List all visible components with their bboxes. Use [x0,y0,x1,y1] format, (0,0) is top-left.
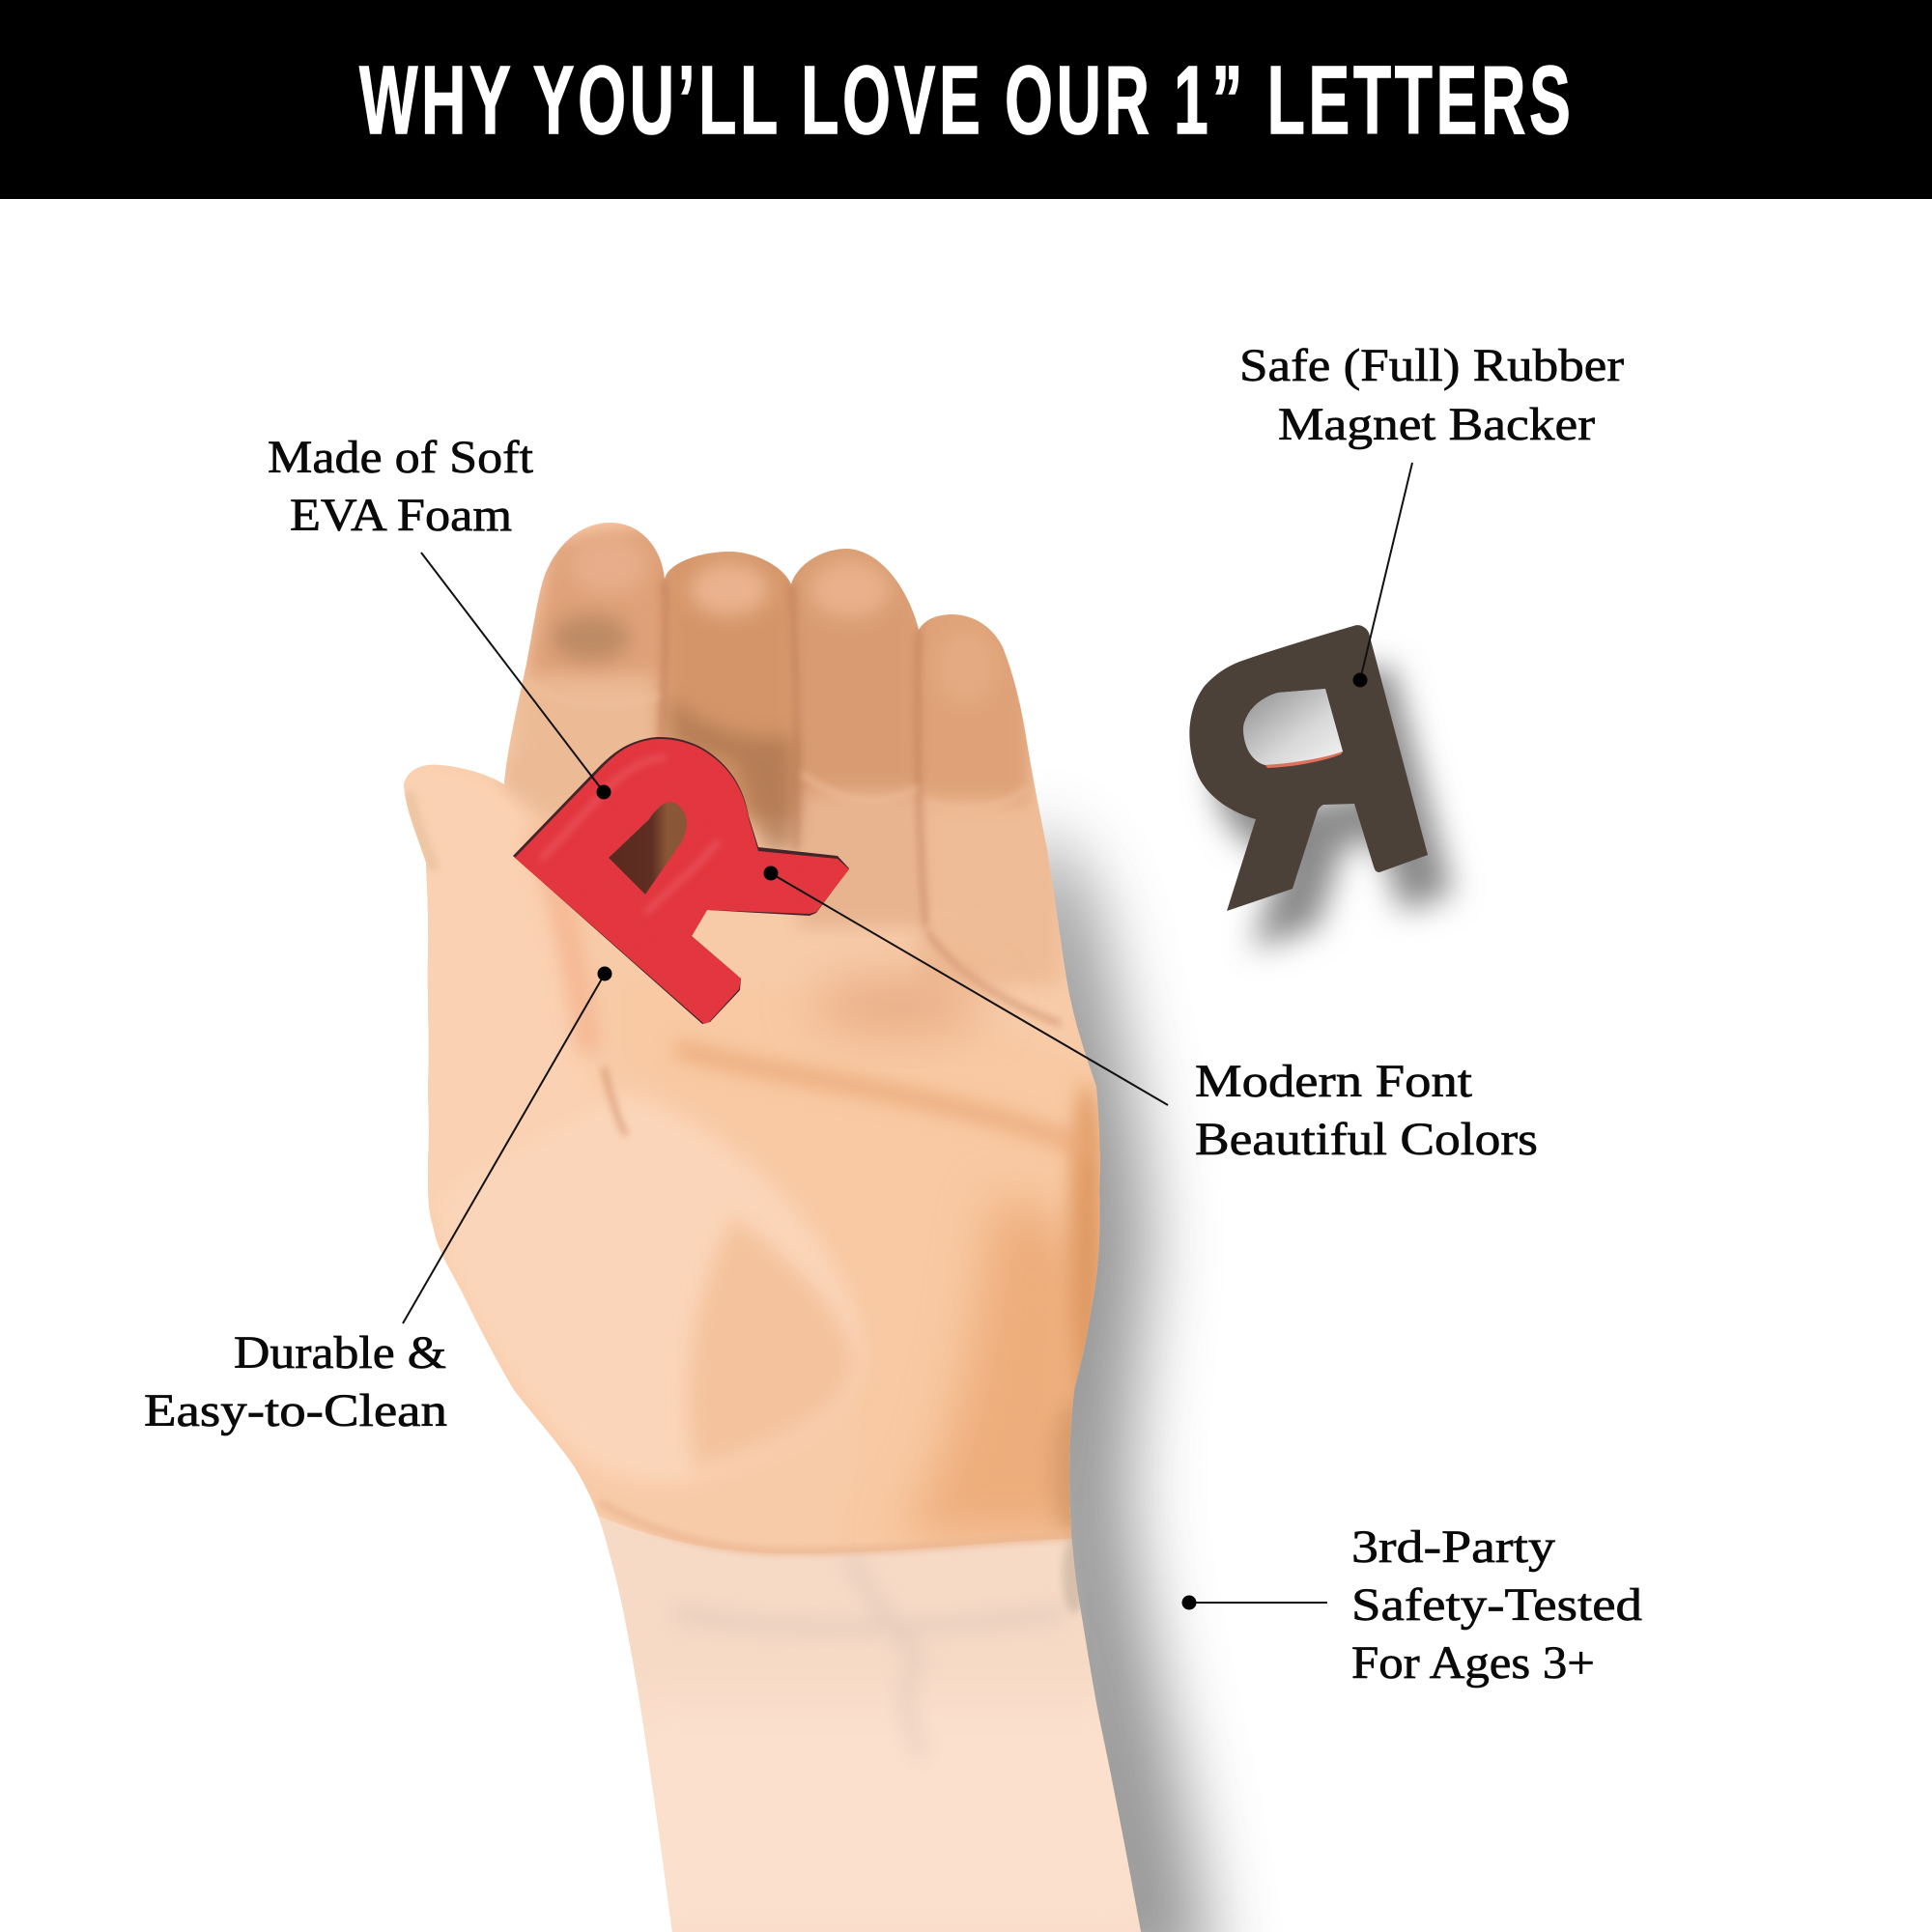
hand photo illustration [396,522,1159,1932]
callout: Durable and Easy-to-Clean: Easy-to-Clean [144,1385,447,1436]
callout: 3rd-Party Safety-Tested For Ages 3+: For Ages 3+ [1351,1637,1595,1689]
shadow behind letter between fingers [667,696,797,850]
finger dark patch [553,614,630,661]
hand drop shadow [1005,831,1212,1932]
fingertip highlights [572,542,645,593]
callout: 3rd-Party Safety-Tested For Ages 3+ [1182,1521,1642,1689]
callout: Modern Font Beautiful Colors [763,866,1538,1165]
web crease [604,1067,626,1135]
dark R shadow [1214,665,1453,950]
hole shadow of backer [1243,689,1343,765]
callout: Safe (Full) Rubber Magnet Backer: Safe (Full) Rubber [1239,340,1624,391]
callout: Safe (Full) Rubber Magnet Backer [1239,340,1624,688]
wrist shade [1061,1536,1080,1614]
wrist crease [599,1502,1082,1551]
icon: red foam letter R [513,737,849,1024]
callout: 3rd-Party Safety-Tested For Ages 3+: Safety-Tested [1351,1579,1642,1631]
callout: Made of Soft EVA Foam: EVA Foam [290,490,512,541]
thenar mound [435,1092,863,1483]
callout: Modern Font Beautiful Colors: Modern Font [1195,1056,1473,1107]
callout: Durable and Easy-to-Clean [144,966,612,1436]
palm shading [1069,1065,1099,1529]
finger tones [502,522,1063,985]
header banner [0,0,1932,199]
wrist area [580,1507,1159,1932]
callout: Durable and Easy-to-Clean: Durable & [234,1327,446,1378]
callout: Safe (Full) Rubber Magnet Backer: Magnet Backer [1278,399,1595,450]
callout: Made of Soft EVA Foam: Made of Soft [268,432,534,483]
icon: dark rubber magnet backer letter R [1189,625,1428,911]
wrist veins [692,1573,1047,1747]
red edge of backer visible in hole [1265,752,1343,768]
title: WHY YOU’LL LOVE OUR 1” LETTERS [359,45,1571,154]
finger creases [800,771,1025,800]
finger separations [661,580,1061,1024]
callout: 3rd-Party Safety-Tested For Ages 3+: 3rd-Party [1351,1521,1555,1573]
callout: Modern Font Beautiful Colors: Beautiful Colors [1195,1114,1538,1165]
callout: Made of Soft EVA Foam [268,432,611,800]
thumb [404,765,593,1215]
